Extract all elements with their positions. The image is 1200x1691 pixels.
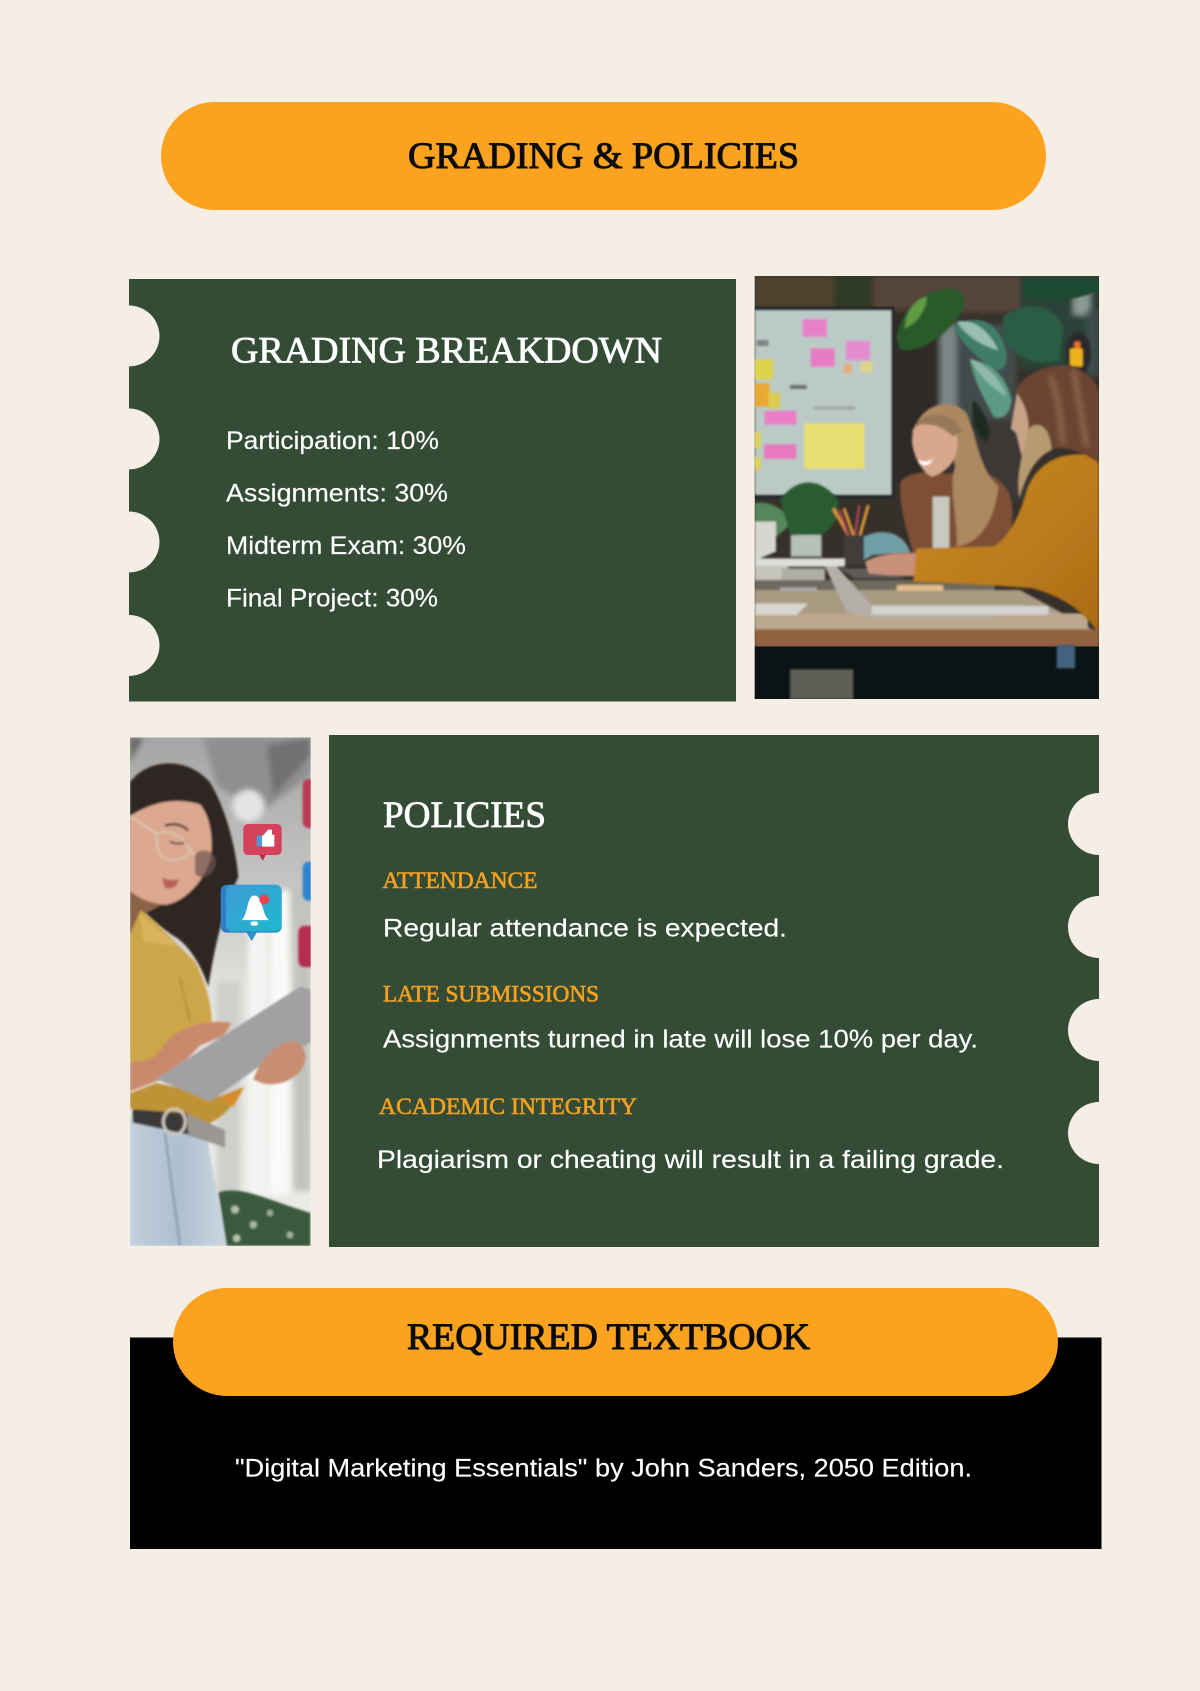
policy: late submissions	[383, 982, 978, 1054]
woman two: face	[1011, 393, 1033, 460]
policy: late submissions: LATE SUBMISSIONS	[383, 982, 599, 1008]
policy: academic integrity	[377, 1094, 1004, 1174]
woman two: hair highlights	[1050, 370, 1087, 447]
leaves behind the women	[897, 288, 965, 350]
grading list: Final Project: 30%	[226, 584, 438, 612]
policy: attendance: Regular attendance is expected.	[383, 914, 787, 942]
icon: bell notification	[221, 885, 282, 941]
arm and hand	[130, 1022, 232, 1091]
jeans	[130, 1118, 227, 1246]
desk items	[755, 558, 845, 567]
policy: academic integrity: ACADEMIC INTEGRITY	[379, 1094, 637, 1120]
policy: late submissions: Assignments turned in late will lose 10% per day.	[383, 1026, 978, 1054]
woman two: hair	[1014, 364, 1099, 464]
laptop and paper	[825, 567, 1058, 617]
grading list: Participation: 10%	[226, 427, 439, 455]
heading: policies: POLICIES	[383, 795, 546, 836]
photo: two women at a meeting table	[755, 276, 1099, 699]
panel: policies	[329, 735, 1099, 1247]
belt	[133, 1109, 225, 1147]
woman two: sweater	[913, 454, 1099, 633]
policy: academic integrity: Plagiarism or cheating will result in a failing grade.	[377, 1146, 1004, 1174]
policy: attendance	[382, 868, 787, 942]
textbook citation: "Digital Marketing Essentials" by John Sanders, 2050 Edition.	[235, 1454, 972, 1482]
sticky notes	[803, 319, 827, 337]
face	[130, 801, 212, 905]
hands	[865, 553, 918, 576]
table surface	[755, 580, 995, 592]
panel: grading breakdown	[129, 279, 736, 702]
title banner	[161, 102, 1046, 210]
neck	[130, 890, 162, 934]
hair	[130, 763, 238, 987]
teal chair	[864, 532, 911, 560]
panel: required textbook	[130, 1288, 1102, 1549]
woman one: face	[912, 419, 957, 477]
grading list	[226, 427, 466, 612]
grading list: Midterm Exam: 30%	[226, 532, 466, 560]
left plants and pots	[755, 503, 792, 537]
woman one: hair	[917, 404, 998, 547]
right hand	[253, 1041, 305, 1084]
pencils in a cup	[833, 505, 868, 535]
title: GRADING & POLICIES	[408, 136, 799, 177]
shirt	[130, 910, 214, 1064]
under the table	[755, 647, 1099, 699]
icon: thumbs up notification	[243, 824, 282, 861]
heading: grading breakdown: GRADING BREAKDOWN	[231, 330, 662, 372]
tablet	[156, 987, 311, 1102]
heading: required textbook: REQUIRED TEXTBOOK	[407, 1317, 810, 1358]
grading list: Assignments: 30%	[226, 480, 448, 508]
woman one: jacket	[900, 472, 1013, 553]
photo: woman with tablet and social icons	[130, 737, 323, 1246]
policy: attendance: ATTENDANCE	[382, 868, 538, 894]
plant	[218, 1190, 311, 1246]
textbook banner	[173, 1288, 1058, 1396]
side icons	[303, 779, 323, 828]
